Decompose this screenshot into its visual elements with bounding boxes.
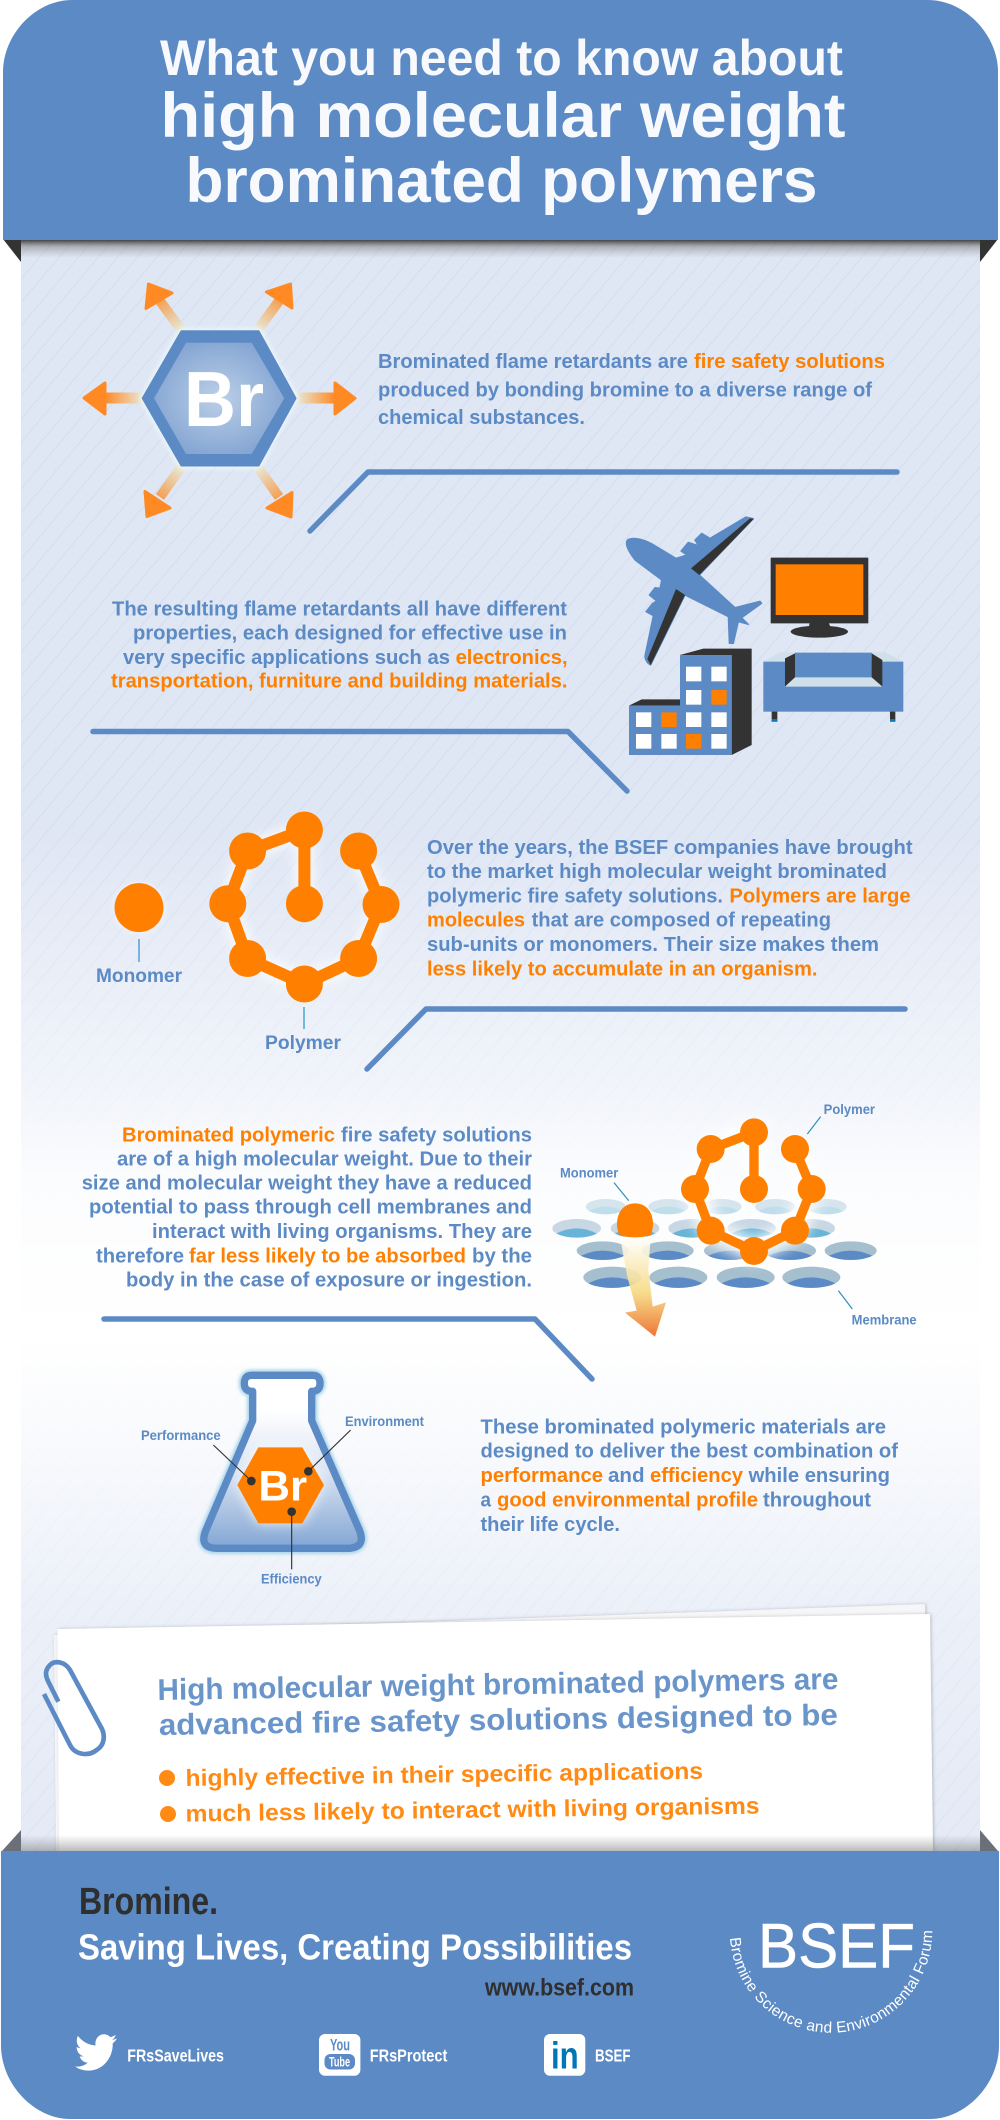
labels and leaders: Polymer [824,1101,876,1117]
text block: BSEF companies: polymeric fire safety solutions. [427,885,723,908]
text block: fire safety solutions: chemical substances. [378,406,585,429]
text block: different properties: electronics, [456,646,568,669]
callouts: performance, environment, efficiency: Environment [345,1413,424,1429]
text block: best combination: designed to deliver the best combination of [480,1440,898,1462]
labels and leaders: Monomer [560,1164,619,1180]
tagline: Bromine. [79,1881,218,1923]
text block: best combination [480,1416,898,1536]
text block: best combination: performance [480,1464,603,1487]
text block: cell membranes: interact with living organisms. They are [152,1220,532,1243]
callouts: performance, environment, efficiency: Efficiency [261,1570,322,1586]
icon: flask with Br hexagon: Br [258,1463,307,1511]
icon: monomer: Monomer [96,966,183,987]
text block: BSEF companies: Over the years, the BSEF companies have brought [427,836,913,859]
header banner [3,0,998,240]
diagram: polymer and monomer at cell membrane [552,1101,917,1337]
text block: different properties [111,598,568,692]
icon: polymer [209,812,400,1054]
paper heading [157,1663,839,1742]
tagline: Saving Lives, Creating Possibilities [78,1926,632,1968]
text block: fire safety solutions: fire safety solutions [694,350,885,373]
title [160,30,846,216]
text block: cell membranes: body in the case of exposure or ingestion. [126,1268,532,1291]
panel: paper summary note [54,1604,933,1851]
twitter handle: FRsSaveLives [127,2046,224,2066]
labels and leaders: Membrane [852,1311,917,1327]
icon: flask with Br hexagon [141,1375,424,1586]
text block: cell membranes: size and molecular weight they have a reduced [82,1172,532,1194]
tagline: www.bsef.com [484,1975,634,2002]
icon: monomer [96,883,183,987]
text block: cell membranes [82,1123,532,1291]
linkedin handle: BSEF [595,2046,631,2066]
text block: best combination: their life cycle. [480,1513,620,1536]
text block: different properties: properties, each designed for effective use in [133,622,567,645]
text block: best combination: good environmental profile [497,1488,758,1511]
text block: fire safety solutions: Brominated flame retardants are [378,350,688,373]
icon: bromine hexagon with arrows [84,284,355,517]
icon: paperclip [44,1662,104,1754]
icon: television [771,558,868,638]
text block: BSEF companies: Polymers are large [729,885,911,908]
text block: best combination: and [608,1464,644,1487]
text block: BSEF companies: molecules [427,909,525,932]
text block: best combination: efficiency [650,1464,744,1487]
text block: best combination: throughout [763,1488,871,1511]
panel: striped paper background [21,240,980,1851]
text block: cell membranes: by the [472,1244,532,1268]
paper bullet list: much less likely to interact with living organisms [185,1793,760,1827]
icon: youtube: You [330,2036,350,2055]
paper bullet list [159,1758,760,1827]
icon: polymer: Polymer [265,1033,342,1054]
text block: cell membranes: are of a high molecular weight. Due to their [117,1147,532,1170]
text block: best combination: while ensuring [748,1464,890,1487]
icon: bromine hexagon with arrows: Br [184,355,264,443]
paper heading: advanced fire safety solutions designed to be [159,1699,838,1742]
text block: BSEF companies: less likely to accumulate in an organism. [427,957,818,980]
text block: best combination: These brominated polymeric materials are [480,1416,886,1439]
title: high molecular weight [160,81,846,151]
title: brominated polymers [186,146,818,216]
text block: different properties: transportation, furniture and building materials. [111,670,568,692]
text block: fire safety solutions [378,350,885,429]
title: What you need to know about [160,30,843,86]
callouts: performance, environment, efficiency [141,1413,424,1586]
icon: sofa [763,652,903,722]
text block: cell membranes: far less likely to be absorbed [189,1244,466,1268]
paper heading: High molecular weight brominated polymers are [157,1663,839,1707]
icon: building [629,649,752,755]
icon: twitter [75,2034,117,2071]
text block: BSEF companies: sub-units or monomers. Their size makes them [427,933,879,956]
icon: youtube: Tube [329,2054,350,2070]
youtube handle: FRsProtect [370,2046,447,2066]
text block: fire safety solutions: produced by bonding bromine to a diverse range of [378,378,872,402]
text block: cell membranes: fire safety solutions [341,1123,532,1146]
text block: BSEF companies: that are composed of repeating [532,909,831,932]
icon: linkedin: in [551,2035,579,2077]
icon: airplane [626,517,762,665]
text block: best combination: a [480,1488,492,1511]
text block: cell membranes: potential to pass through cell membranes and [89,1195,532,1218]
text block: different properties: very specific applications such as [123,646,450,669]
icon: youtube [319,2034,360,2076]
logo: BSEF: Bromine Science and Environmental Forum [730,1931,932,2033]
text block: different properties: The resulting flame retardants all have different [112,598,567,621]
logo: BSEF: BSEF [758,1912,915,1982]
text block: cell membranes: Brominated polymeric [122,1123,335,1146]
monomer passing through with arrow [617,1203,666,1337]
callouts: performance, environment, efficiency: Performance [141,1427,221,1443]
footer banner [1,1851,999,2119]
membrane holes [552,1199,877,1288]
text block: BSEF companies [427,836,913,980]
text block: BSEF companies: to the market high molecular weight brominated [427,860,887,883]
paper bullet list: highly effective in their specific applications [185,1758,703,1791]
icons: applications [626,517,903,755]
labels and leaders [560,1101,917,1327]
polymer chain glow and body [681,1118,826,1265]
tagline [78,1881,634,2002]
text block: cell membranes: therefore [96,1244,184,1268]
